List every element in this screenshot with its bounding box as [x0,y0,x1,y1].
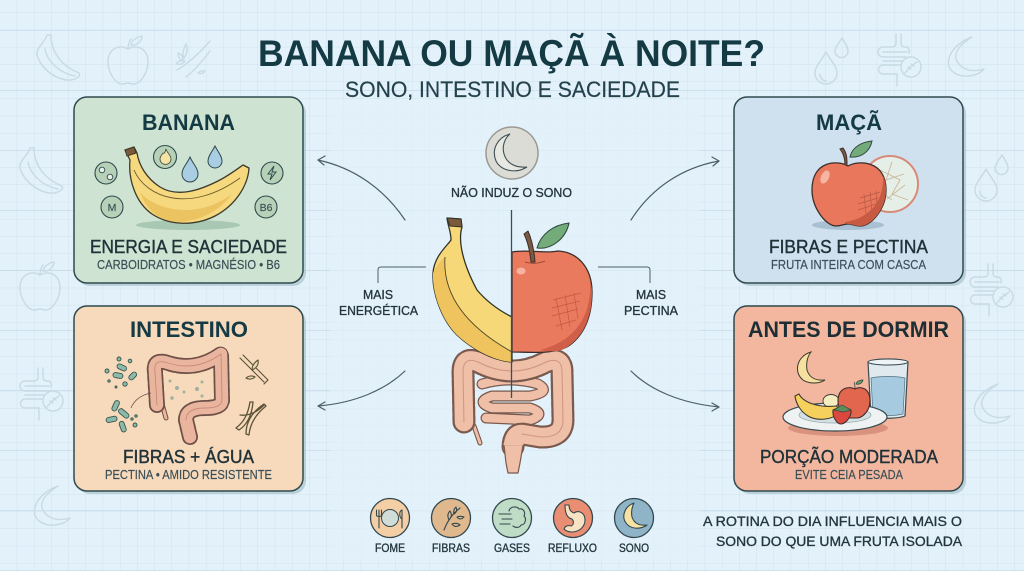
callout: more energetic [339,267,426,318]
text: fibres and water: FIBRAS + ÁGUA [123,447,254,467]
icon: gas: GASES [494,543,530,555]
plate shadow [788,420,888,436]
subtitle: SONO, INTESTINO E SACIEDADE [345,77,680,102]
callout: more pectin: MAIS [636,288,666,302]
central intestine [463,360,563,473]
text: fibre and pectin: FIBRAS E PECTINA [769,237,928,257]
icon: sleep [614,498,654,555]
panel: before bed [734,306,966,494]
particles inside intestine [168,380,204,400]
callout: more pectin [598,267,679,318]
icon: flame badge [154,146,176,168]
icon: lightning badge [261,162,283,184]
panel: banana [74,97,306,286]
central divider [510,210,512,398]
icon: fibre: FIBRAS [432,543,470,555]
icon row: topics [370,498,654,555]
icon: water drops [182,146,222,182]
arrow: to apple [631,157,719,220]
callout: more energetic: MAIS [363,288,393,302]
icon: hunger: FOME [375,543,405,555]
icon: reflux [548,498,597,555]
icon: bacteria [105,357,138,433]
icon: b6 badge: B6 [260,202,273,214]
icon: hunger [370,498,410,555]
text: avoid heavy supper: EVITE CEIA PESADA [795,468,904,482]
callout: more energetic: ENERGÉTICA [339,303,419,318]
text: banana nutrients: CARBOIDRATOS • MAGNÉSIO • B6 [97,257,280,272]
icon: b6 badge [255,196,277,218]
note: daily routine [703,514,962,549]
icon: banana slice [823,394,839,408]
icon: magnesium badge: M [108,202,116,214]
heading: banana: BANANA [142,110,235,135]
icon: sleep: SONO [619,543,649,555]
icon: large intestine [155,354,222,437]
icon: small apple [838,380,870,418]
arrow: to before bed [631,371,719,411]
icon: apple [812,141,886,226]
icon: fibre [432,498,470,555]
callout: more pectin: PECTINA [624,304,679,318]
text: energy and satiety: ENERGIA E SACIEDADE [90,237,287,257]
heading: apple: MAÇÃ [816,110,882,135]
note: daily routine: A ROTINA DO DIA INFLUENCIA MAIS O [703,514,962,529]
text: whole fruit with skin: FRUTA INTEIRA COM CASCA [771,258,927,272]
text: moderate portion: PORÇÃO MODERADA [760,446,938,467]
arrow: to intestine [318,371,405,410]
heading: intestine: INTESTINO [130,317,248,342]
text: pectin and resistant starch: PECTINA • AMIDO RESISTENTE [105,468,272,482]
icon: gas [492,498,532,555]
icon: plate [783,403,887,431]
label: does not induce sleep: NÃO INDUZ O SONO [451,185,572,200]
panel: intestine [74,306,306,494]
icon: small banana [795,394,838,419]
central half banana [433,218,512,362]
heading: before bed: ANTES DE DORMIR [748,317,949,342]
icon: moon badge [486,127,538,179]
title: BANANA OU MAÇÃ À NOITE? [258,32,765,74]
connector to intestine [131,393,151,408]
note: daily routine: SONO DO QUE UMA FRUTA ISOLADA [716,534,962,549]
icon: dots badge [95,162,117,184]
icon: reflux: REFLUXO [548,543,597,555]
icon: banana [125,147,249,223]
icon: strawberry [833,405,851,424]
panel: apple [734,97,966,286]
central half apple [512,223,592,352]
icon: fibres [236,355,268,435]
icon: moon [797,352,825,383]
icon: pectin magnifier [862,156,918,212]
banana shadow [136,220,240,230]
apple shadow [812,220,884,230]
arrow: to banana [318,156,405,220]
icon: magnesium badge [101,196,123,218]
icon: water glass [868,359,908,418]
